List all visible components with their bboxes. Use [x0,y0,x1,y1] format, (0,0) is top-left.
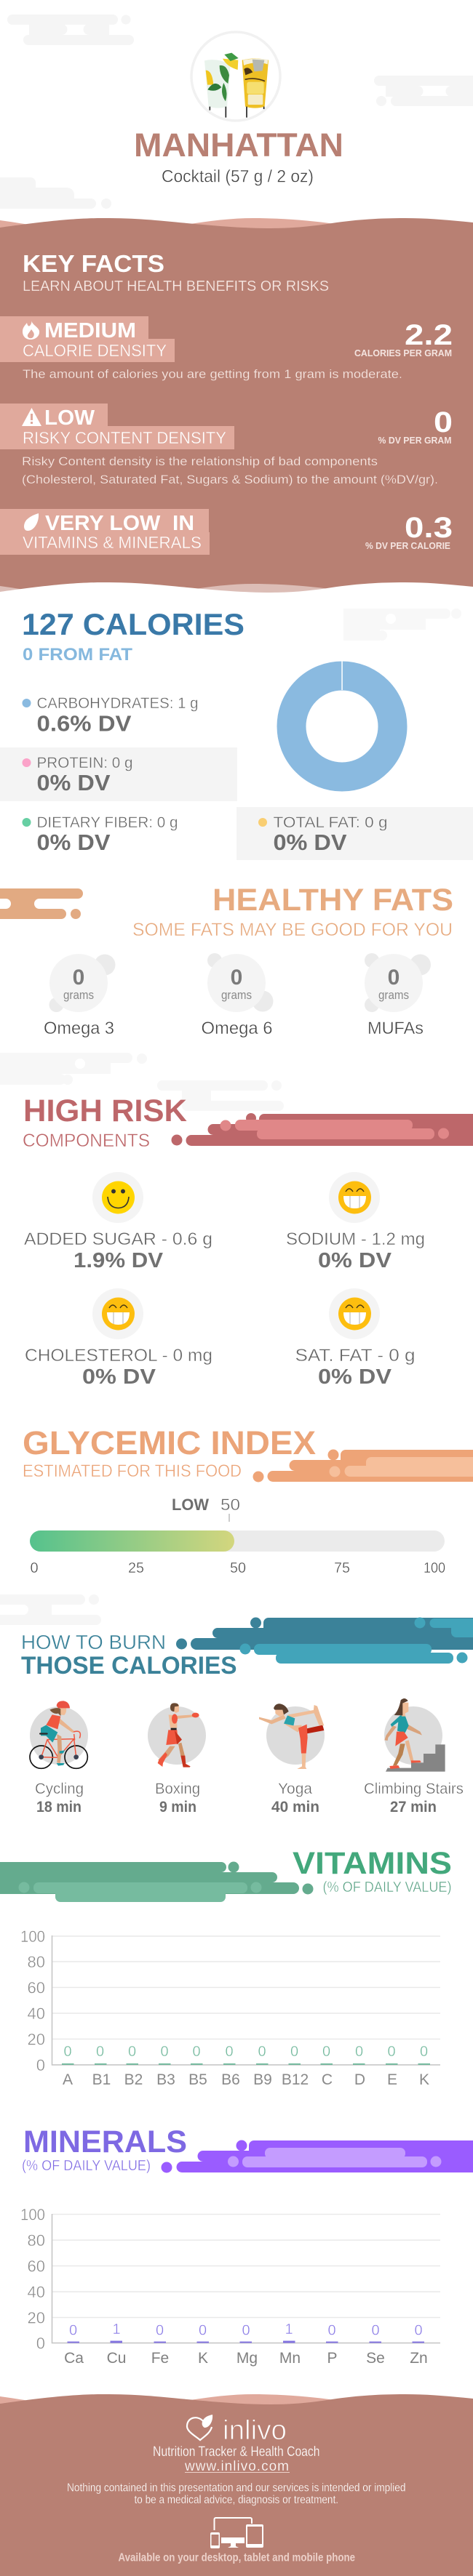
panel: vitamins [0,1846,452,2088]
background cloud: burn section [0,1594,101,1625]
bar chart: vitamins: 0 [387,2044,396,2060]
stat circle: omega 6 [201,953,274,1038]
website link: www.inlivo.com [184,2459,289,2474]
bar chart: minerals: K [198,2350,208,2367]
icon: smiley [102,1181,135,1214]
bar chart: vitamins: 0 [322,2044,330,2060]
label block: risky content density: RISKY CONTENT DENSITY [23,428,226,447]
bar chart: vitamins: 20 [28,2030,45,2049]
icon: grin [338,1181,371,1214]
stat circle: omega 3: Omega 3 [44,1019,114,1038]
bar chart: vitamins: B9 [253,2071,272,2088]
bar chart: vitamins: 0 [290,2044,298,2060]
subheading: from fat: 0 FROM FAT [23,645,132,665]
bar chart: minerals: 80 [28,2231,45,2250]
stat circle: omega 6: grams [221,988,252,1002]
gauge scale: 25 [128,1560,144,1576]
logo: inlivo [187,2415,287,2446]
stat circle: omega 6: 0 [231,966,242,990]
bar chart: vitamins: D [354,2071,365,2088]
gauge scale: 75 [334,1560,350,1576]
description: risky content [22,454,438,486]
panel: footer [0,2394,473,2576]
description: calorie density: The amount of calories you are getting from 1 gram is moderate. [23,367,402,381]
donut chart [291,660,393,777]
panel: calories [0,607,473,860]
bar chart: minerals: 100 [20,2206,45,2223]
bar chart: minerals: 60 [28,2257,45,2276]
bar chart: minerals: 0 [199,2322,207,2338]
activity: yoga: 40 min [271,1799,319,1815]
stat: percent dv per gram [378,406,453,446]
risk item: sodium [286,1172,425,1272]
risk item: cholesterol [25,1288,212,1389]
background clouds: above high risk [0,1053,284,1111]
label block: risky content density [0,404,234,449]
bar chart: vitamins: 0 [225,2044,234,2060]
banner cloud: high risk [172,1113,473,1146]
tagline: Nutrition Tracker & Health Coach [153,2444,320,2460]
bar chart: minerals: Se [366,2350,385,2367]
stat: percent dv per gram: % DV PER GRAM [378,435,451,446]
icon: leaf [24,513,39,531]
risk item: added sugar [24,1172,212,1272]
bar chart: vitamins: B5 [188,2071,207,2088]
stat circle: omega 3: grams [63,988,94,1002]
heading: how to burn [21,1631,237,1680]
bar chart: minerals [20,2206,440,2367]
risk item: added sugar: ADDED SUGAR - 0.6 g [24,1229,212,1249]
marker: low 50: 50 [220,1496,240,1514]
subheading: healthy fats: SOME FATS MAY BE GOOD FOR YOU [132,920,453,940]
activity: yoga [259,1704,325,1815]
risk item: sodium: SODIUM - 1.2 mg [286,1229,425,1249]
bar chart: vitamins: 0 [420,2044,428,2060]
risk item: saturated fat [295,1288,415,1389]
bar chart: vitamins: 80 [28,1953,45,1971]
bar chart: minerals: Ca [64,2350,84,2367]
stat circle: mufas: 0 [388,966,400,990]
bar chart: vitamins [20,1927,440,2088]
banner cloud: healthy fats [0,888,83,919]
bar chart: vitamins: B12 [282,2071,309,2088]
macro: total fat: 0% DV [274,830,347,855]
stat circle: omega 3 [44,954,115,1038]
activity: climbing stairs: Climbing Stairs [364,1781,464,1797]
bar chart: minerals: Zn [410,2350,428,2367]
heading: calories: 127 CALORIES [22,607,245,641]
disclaimer: to be a medical advice, diagnosis or treatment. [134,2494,338,2506]
heading: high risk: HIGH RISK [23,1094,187,1128]
icon: grin [102,1297,135,1331]
stat: percent dv per calorie: % DV PER CALORIE [365,540,450,551]
stat circle: omega 3: 0 [73,966,84,990]
stat: calories per gram [354,319,453,358]
subheading: key facts: LEARN ABOUT HEALTH BENEFITS OR RISKS [23,278,329,294]
heading: glycemic index: GLYCEMIC INDEX [23,1424,316,1461]
risk item: saturated fat: SAT. FAT - 0 g [295,1346,415,1365]
bar chart: minerals: 0 [371,2322,380,2338]
subheading: components: COMPONENTS [23,1131,150,1151]
macro: carbohydrates: 0.6% DV [36,711,132,736]
risk item: sodium: 0% DV [318,1249,392,1272]
banner cloud: glycemic index [253,1450,473,1482]
panel: healthy fats [0,883,453,1038]
icon: yoga pose [259,1704,324,1769]
banner cloud: burn [176,1617,473,1664]
panel: how to burn those calories [21,1617,473,1815]
bar chart: vitamins: 0 [96,2044,104,2060]
bar chart: vitamins: 0 [128,2044,136,2060]
label block: calorie density: CALORIE DENSITY [23,341,167,360]
bar chart: minerals: 0 [414,2322,423,2338]
description: risky content: (Cholesterol, Saturated Fat, Sugars & Sodium) to the amount (%DV/gr). [22,473,438,486]
title: MANHATTAN [134,127,343,164]
bar chart: minerals: 0 [36,2334,45,2353]
icon: climber and stairs [384,1698,445,1772]
bar chart: vitamins: A [63,2071,73,2088]
bar chart: minerals: 0 [156,2322,164,2338]
macro: dietary fiber: 0% DV [36,830,111,855]
subheading: minerals: (% OF DAILY VALUE) [22,2158,151,2174]
heading: vitamins: VITAMINS [293,1846,452,1881]
panel: minerals [20,2124,473,2367]
macro: protein: 0% DV [36,770,111,795]
label block: risky content density: LOW [44,406,95,430]
icon: warning triangle [22,408,41,426]
activity: yoga: Yoga [278,1781,312,1797]
icon: devices [210,2518,263,2548]
heading: healthy fats: HEALTHY FATS [212,883,453,918]
bar chart: vitamins: B2 [124,2071,143,2088]
bar chart: minerals: 1 [285,2322,293,2338]
macro: total fat: TOTAL FAT: 0 g [274,814,387,831]
bar chart: vitamins: 0 [63,2044,72,2060]
macro: dietary fiber [22,814,178,855]
stat: percent dv per gram: 0 [434,406,453,438]
stat circle: omega 6: Omega 6 [201,1019,272,1038]
activity: cycling [30,1701,88,1815]
risk item: cholesterol: CHOLESTEROL - 0 mg [25,1346,212,1365]
gauge scale [31,1560,445,1576]
bar chart: vitamins: C [322,2071,333,2088]
bar chart: minerals: Cu [107,2350,126,2367]
bar chart: minerals: P [327,2350,338,2367]
activity: boxing: Boxing [155,1781,200,1797]
bar chart: vitamins: 60 [28,1979,45,1997]
label block: vitamins and minerals [0,509,210,555]
bar chart: vitamins: K [419,2071,429,2088]
activity: climbing stairs: 27 min [390,1799,437,1815]
bar chart: minerals: Mn [279,2350,301,2367]
bar chart: minerals: 20 [28,2309,45,2327]
stat: percent dv per calorie [365,512,453,551]
bar chart: vitamins: 100 [20,1927,45,1946]
header: background clouds [0,15,473,209]
bar chart: vitamins: B6 [221,2071,240,2088]
label block: vitamins and minerals: VITAMINS & MINERALS [23,533,202,552]
macro: carbohydrates [22,694,198,736]
food image: two cocktail glasses in a ring [191,32,280,121]
heading: how to burn: HOW TO BURN [21,1631,166,1653]
icon: boxer [158,1703,199,1768]
macro: protein: PROTEIN: 0 g [36,754,132,771]
heading: how to burn: THOSE CALORIES [21,1652,237,1680]
risk item: added sugar: 1.9% DV [73,1249,164,1272]
bar chart: vitamins: 0 [355,2044,363,2060]
macro: carbohydrates: CARBOHYDRATES: 1 g [36,694,198,712]
macro: total fat [236,807,473,860]
label block: calorie density [0,316,175,362]
availability note: Available on your desktop, tablet and mobile phone [118,2552,355,2564]
bar chart: vitamins: B3 [156,2071,175,2088]
bar chart: vitamins: 0 [192,2044,201,2060]
stat circle: mufas: grams [378,988,409,1002]
risk item: saturated fat: 0% DV [318,1365,392,1389]
activity: cycling: 18 min [36,1799,82,1815]
stat: percent dv per calorie: 0.3 [405,512,453,544]
bar chart: minerals: 0 [242,2322,250,2338]
macro: dietary fiber: DIETARY FIBER: 0 g [36,814,178,831]
bar chart: minerals: 1 [112,2322,121,2338]
bar chart: vitamins: 0 [160,2044,169,2060]
bar chart: vitamins: 40 [28,2005,45,2023]
risk item: cholesterol: 0% DV [82,1365,156,1389]
description: risky content: Risky Content density is the relationship of bad components [22,454,378,468]
panel: high risk components [23,1094,473,1389]
bar chart: minerals: Mg [236,2350,258,2367]
banner cloud: vitamins [0,1861,313,1902]
panel: glycemic index [23,1424,473,1576]
icon: grin [338,1297,371,1331]
icon: flame [23,320,39,340]
bar chart: vitamins: B1 [92,2071,111,2088]
activity: boxing: 9 min [159,1799,196,1815]
bar chart: vitamins: 0 [258,2044,266,2060]
icon: cyclist [30,1701,87,1768]
bar chart: minerals: Fe [151,2350,169,2367]
marker: low 50 [172,1496,240,1522]
subheading: vitamins: (% OF DAILY VALUE) [323,1879,451,1895]
stat circle: mufas: MUFAs [367,1019,424,1038]
heading: minerals: MINERALS [23,2124,187,2159]
stat: calories per gram: 2.2 [405,319,453,351]
label block: calorie density: MEDIUM [44,319,136,342]
panel: key facts [0,218,473,604]
gauge scale: 100 [424,1560,445,1576]
macro: protein [0,747,237,801]
stat circle: mufas [365,953,431,1038]
subheading: glycemic index: ESTIMATED FOR THIS FOOD [23,1461,242,1481]
gauge bar [30,1530,445,1552]
bar chart: minerals: 0 [327,2322,336,2338]
gauge scale: 0 [31,1560,39,1576]
bar chart: minerals: 40 [28,2283,45,2301]
activity: climbing stairs [364,1698,464,1815]
logo: inlivo: inlivo [223,2415,287,2446]
activity: cycling: Cycling [35,1781,84,1797]
bar chart: vitamins: 0 [36,2056,45,2074]
heading: key facts: KEY FACTS [23,250,164,277]
banner cloud: minerals [162,2140,473,2172]
gauge scale: 50 [230,1560,246,1576]
disclaimer: Nothing contained in this presentation and our services is intended or implied [67,2482,406,2494]
disclaimer [67,2482,406,2506]
label block: vitamins and minerals: VERY LOW IN [45,512,194,535]
bar chart: vitamins: E [387,2071,397,2088]
marker: low 50: LOW [172,1496,209,1514]
activity: boxing [148,1703,206,1815]
bar chart: minerals: 0 [69,2322,77,2338]
subtitle: serving: Cocktail (57 g / 2 oz) [162,167,314,186]
stat: calories per gram: CALORIES PER GRAM [354,348,452,358]
